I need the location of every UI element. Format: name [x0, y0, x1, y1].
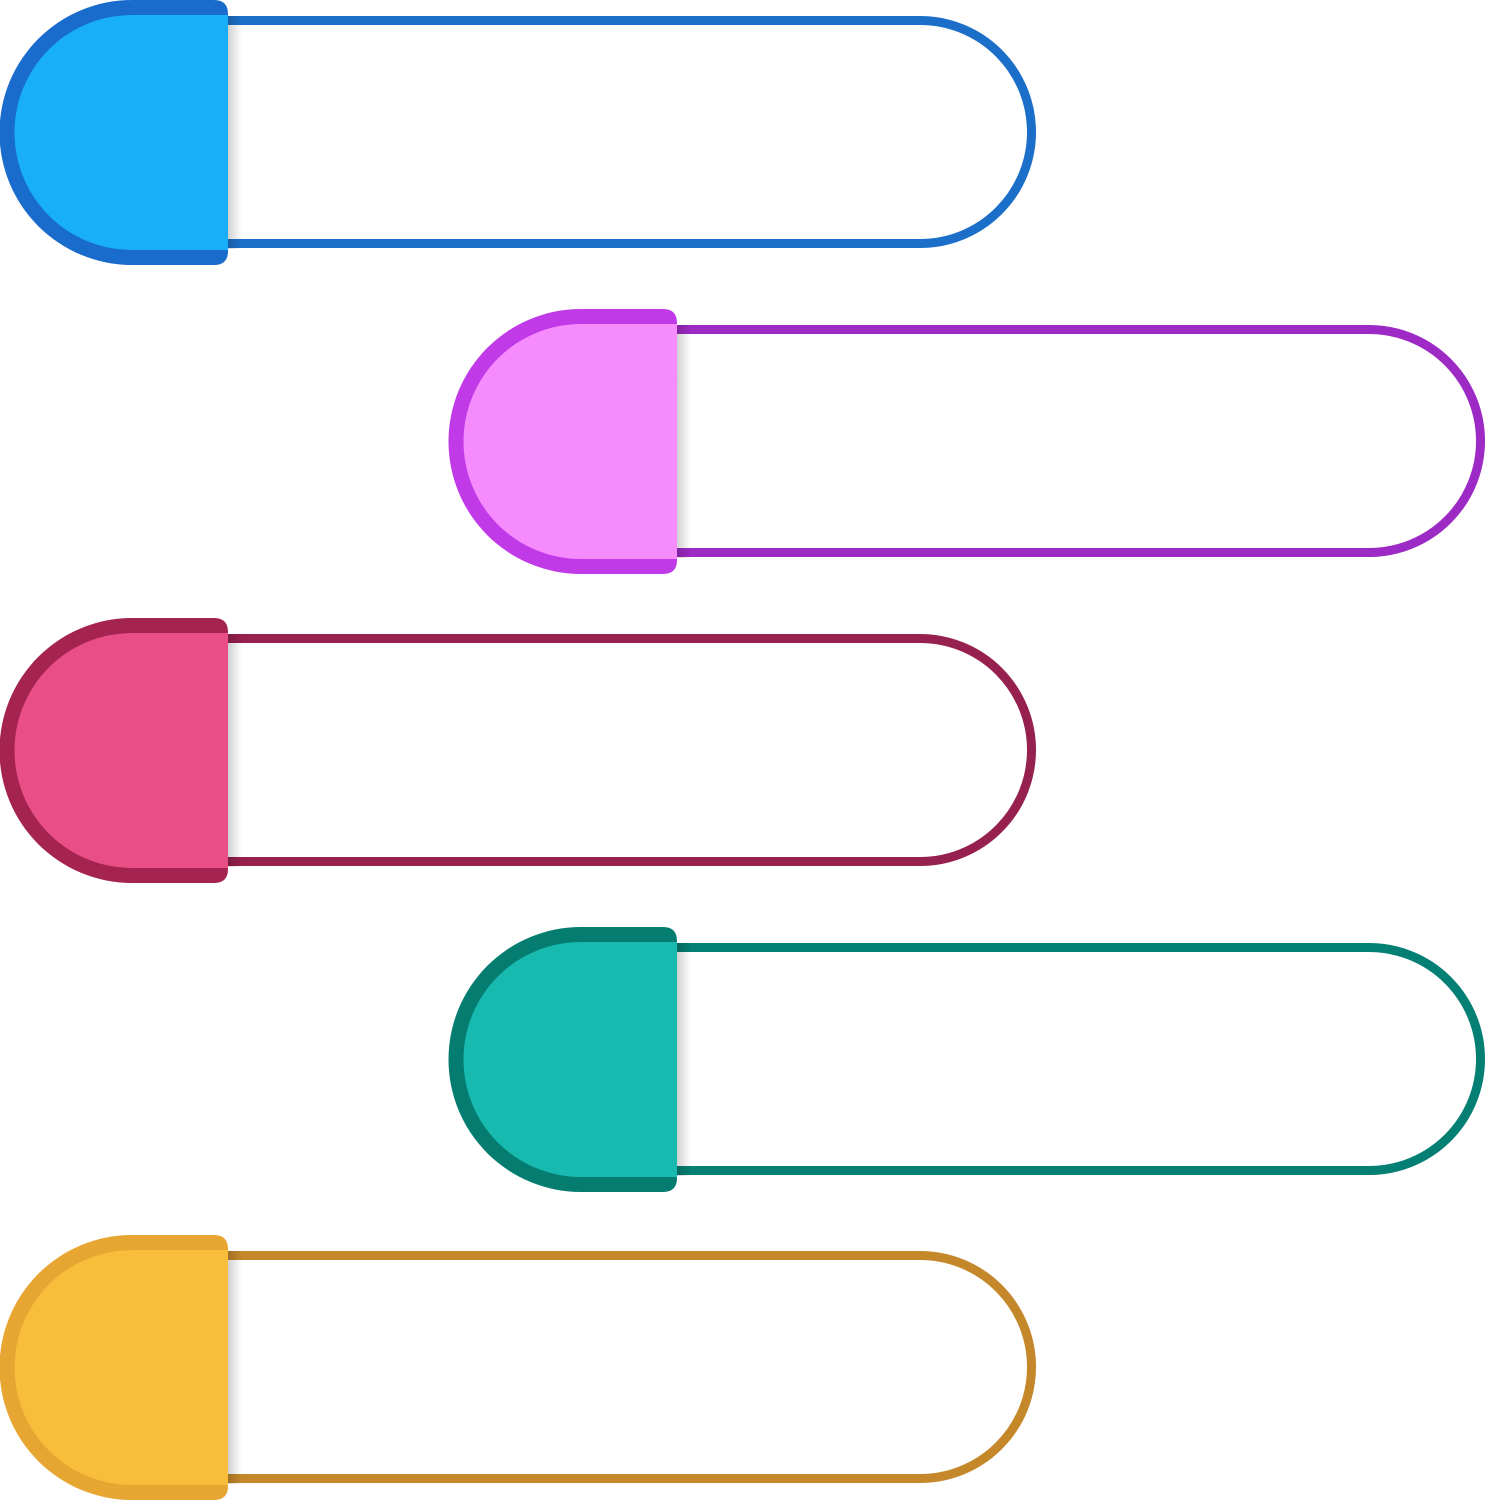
panel: item 5 (yellow)	[0, 1235, 1032, 1500]
cap 5	[0, 1235, 228, 1500]
outline 2	[669, 330, 1480, 552]
outline 5	[220, 1256, 1032, 1478]
outline 1	[220, 20, 1032, 244]
outline 4	[669, 948, 1480, 1170]
panel: item 2 (purple)	[448, 309, 1480, 574]
panel: item 4 (teal)	[448, 927, 1480, 1192]
cap 4	[448, 927, 677, 1192]
cap 2	[448, 309, 677, 574]
cap 3	[0, 618, 228, 883]
panel: item 1 (blue)	[0, 0, 1032, 265]
panel: item 3 (magenta)	[0, 618, 1032, 883]
outline 3	[220, 638, 1032, 862]
cap 1	[0, 0, 228, 265]
